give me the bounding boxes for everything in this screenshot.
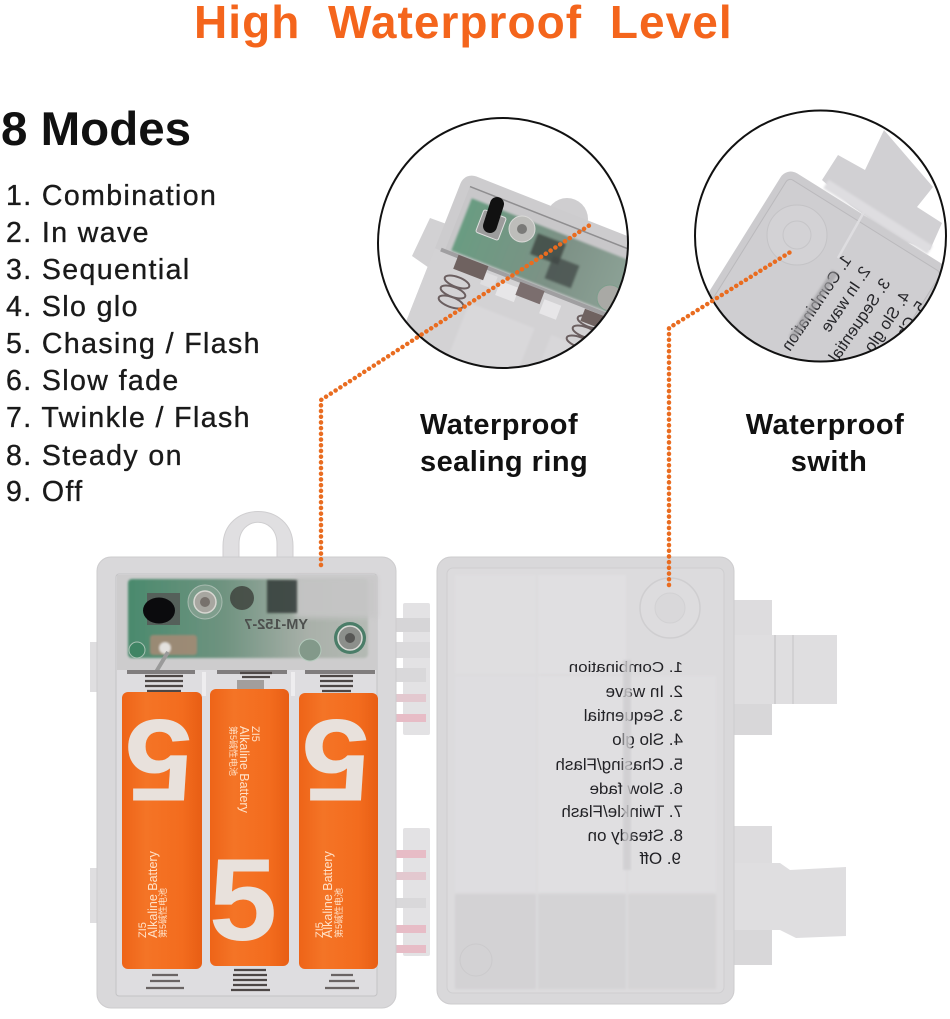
magnifier: switch detail: 2. In wave [817,263,874,336]
mirrored mode list: 7. Twinkle/Flash [561,802,683,821]
label: waterproof switch: Waterproof [746,409,904,441]
battery 1: ZI5 [137,922,149,938]
push switch [143,593,180,625]
list of modes: 2. In wave [6,217,150,249]
battery 1: 5 [125,695,193,825]
mirrored mode list: 1. Combination [569,660,683,676]
battery 2 [209,689,289,966]
battery 3: Alkaline Battery [321,850,335,938]
battery 2: 第5碱性电池 [228,726,239,776]
list of modes: 9. Off [6,476,84,508]
battery 3: 第5碱性电池 [333,888,344,938]
magnifier: switch detail [694,110,947,362]
label: waterproof sealing ring: sealing ring [420,446,588,478]
battery 2: Alkaline Battery [237,726,251,814]
battery 2: ZI5 [249,726,261,742]
mirrored mode list: 8. Steady on [588,826,683,845]
well rear panel [117,575,377,670]
mirrored mode list: 9. Off [639,849,681,868]
mirrored mode list: 5. Chasing/Flash [555,755,683,774]
battery 1: 第5碱性电池 [157,888,168,938]
list of modes: 7. Twinkle / Flash [6,402,251,434]
tray body [97,557,396,1008]
battery box: open tray [90,512,430,1008]
battery contacts and springs [127,670,375,990]
circuit board [128,576,377,661]
hanging loop [223,512,293,560]
dotted leader: switch [669,251,792,585]
waterproof switch membrane [640,578,700,638]
label: waterproof sealing ring: Waterproof [420,409,578,441]
battery 2: 5 [209,835,277,965]
magnifier: switch detail: 5. Chasing/Flash [846,298,930,411]
mirrored mode list: 4. Slo glo [612,730,683,749]
magnifier: sealing ring detail [377,117,629,369]
label: waterproof sealing ring [420,409,588,478]
battery box: lid [437,557,846,1004]
magnifier: switch detail: 1. Combination [778,252,855,354]
battery 3: 5 [302,695,370,825]
lid body [437,557,734,1004]
magnifier: switch detail: 3. Sequential [826,275,894,365]
mirrored mode list: 3. Sequential [584,706,683,725]
list of modes: 1. Combination [6,180,217,212]
list of modes: 6. Slow fade [6,365,180,397]
mirrored mode list [555,660,683,868]
screws [188,585,366,654]
label: waterproof switch: swith [791,446,867,478]
battery 1 [122,692,202,969]
small ring bottom left [460,944,492,976]
list of modes: 3. Sequential [6,254,191,286]
list of modes [6,180,261,508]
heading: 8 Modes: 8 Modes [1,103,191,156]
board marking, mirrored: YM-152-7 [244,617,308,633]
dotted leader: sealing ring [321,223,593,565]
label: waterproof switch [746,409,904,478]
list of modes: 4. Slo glo [6,291,139,323]
battery 3 [299,693,378,969]
lid hinge clips [730,600,846,965]
list of modes: 5. Chasing / Flash [6,328,261,360]
tray well [116,574,377,996]
battery 3: ZI5 [314,922,326,938]
lead wire [156,652,168,672]
mirrored mode list: 2. In wave [606,682,683,701]
hinge tabs on tray [90,603,430,956]
mirrored mode list: 6. Slow fade [590,781,683,798]
lid compartments [455,575,716,989]
list of modes: 8. Steady on [6,440,183,472]
magnifier: switch detail: 4. Slo glo [861,288,914,355]
battery 1: Alkaline Battery [146,850,160,938]
